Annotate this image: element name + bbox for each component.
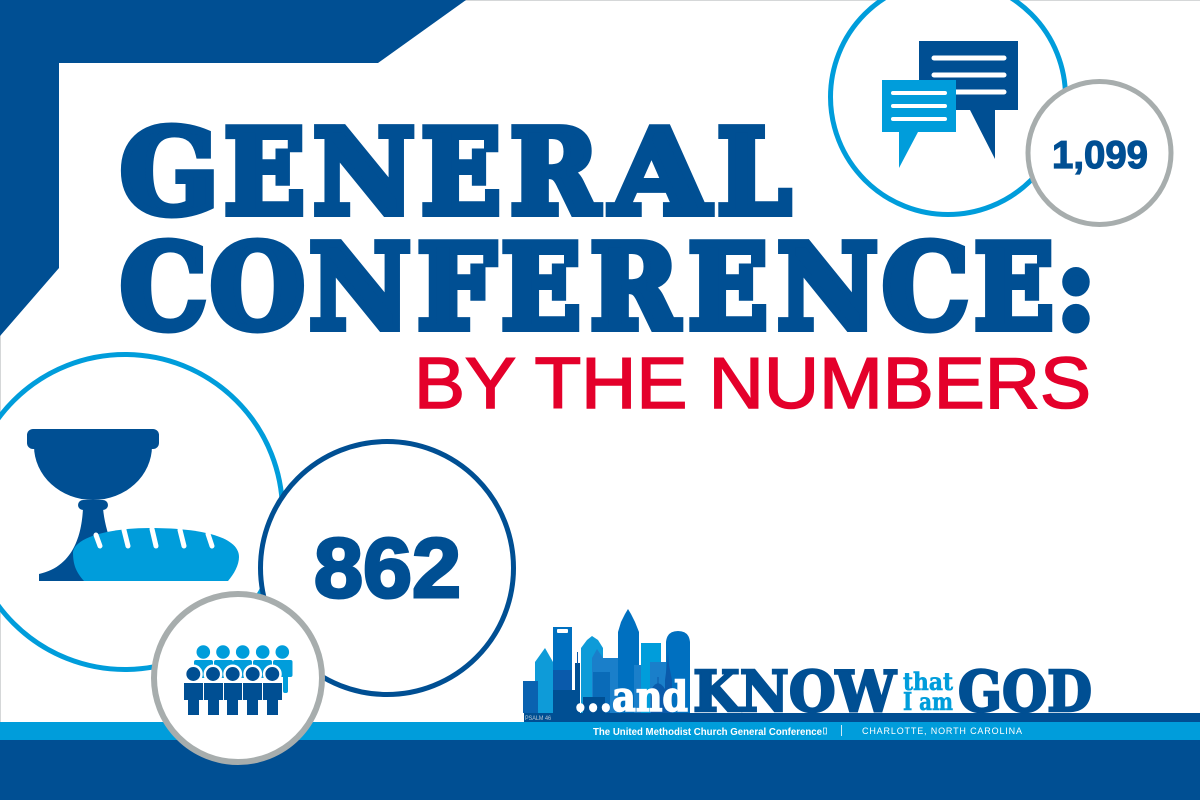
title: O xyxy=(210,220,305,356)
logo: wordmark: GOD xyxy=(958,659,1092,725)
circle: delegates icon xyxy=(154,594,322,762)
circle: 1,099: 1,099 xyxy=(1052,134,1148,177)
title: N xyxy=(313,105,415,241)
logo: wordmark: ...and xyxy=(574,673,688,721)
footer text: CHARLOTTE, NORTH CAROLINA xyxy=(862,726,1022,736)
title: F xyxy=(417,220,496,356)
logo: wordmark: I am xyxy=(903,687,953,716)
logo: wordmark: KNOW xyxy=(693,659,897,725)
icon: bread xyxy=(73,528,239,581)
title: N xyxy=(777,220,878,356)
circle: 862 xyxy=(260,442,514,694)
title: G xyxy=(120,105,219,241)
title: R xyxy=(510,105,600,241)
logo: skyline xyxy=(523,609,690,713)
subtitle: BY THE NUMBERS xyxy=(414,344,1091,424)
title: C xyxy=(120,220,207,356)
footer text: The United Methodist Church General Conference xyxy=(593,726,822,738)
title: L xyxy=(717,105,791,241)
title: E xyxy=(501,220,581,356)
title: E xyxy=(688,220,768,356)
logo: wordmark xyxy=(574,659,1092,725)
circle: 1,099 xyxy=(1028,82,1171,224)
title xyxy=(120,105,1096,356)
title: E xyxy=(421,105,501,241)
icon: speech bubbles xyxy=(882,41,1018,168)
corner frame shape xyxy=(0,0,466,336)
circle: 862: 862 xyxy=(314,521,461,615)
title: E xyxy=(974,220,1054,356)
footer bands xyxy=(0,713,1200,800)
title: R xyxy=(590,220,680,356)
title: C xyxy=(882,220,969,356)
circle: chat icon xyxy=(830,0,1066,214)
logo: wordmark: that xyxy=(903,667,953,696)
title: E xyxy=(224,105,305,241)
title: : xyxy=(1056,220,1096,356)
icon: people group xyxy=(184,645,292,715)
title: N xyxy=(309,220,411,356)
title: A xyxy=(610,105,711,241)
psalm reference: PSALM 46 xyxy=(525,715,551,722)
icon: chalice xyxy=(27,429,159,581)
footer text xyxy=(593,725,1022,738)
circle: communion icon xyxy=(0,354,282,670)
